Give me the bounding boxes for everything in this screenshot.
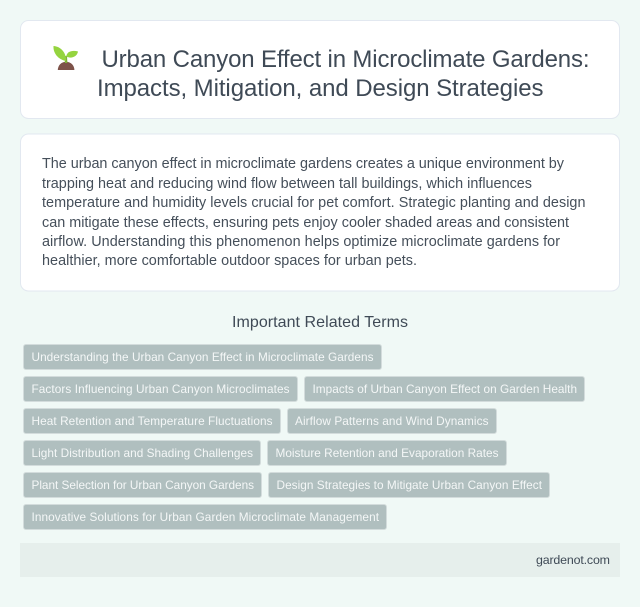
description text: can mitigate these effects, ensuring pets enjoy cooler shaded areas and consistent [42, 215, 569, 231]
chip: innovative solutions [24, 504, 386, 530]
title [97, 46, 590, 102]
chip: understanding [24, 344, 382, 370]
footer source text: gardenot.com [536, 553, 610, 567]
chip: heat retention [24, 408, 280, 434]
chip: plant selection [24, 472, 262, 498]
chip: light [24, 440, 260, 466]
description text: temperature and humidity levels crucial for pet comfort. Strategic planting and design [42, 195, 586, 211]
panel: description [20, 134, 620, 291]
header panel [20, 20, 620, 118]
chip: airflow: Airflow Patterns and Wind Dynamics [295, 414, 489, 428]
chip: moisture [268, 440, 506, 466]
chip: innovative solutions: Innovative Solutions for Urban Garden Microclimate Management [32, 510, 380, 524]
chip: design strategies: Design Strategies to Mitigate Urban Canyon Effect [276, 478, 543, 492]
description text: airflow. Understanding this phenomenon helps optimize microclimate gardens for [42, 234, 560, 250]
description text: healthier, more comfortable outdoor spaces for urban pets. [42, 253, 417, 269]
title: Impacts, Mitigation, and Design Strategies [97, 75, 544, 102]
description text [42, 156, 586, 269]
icon: seedling [53, 46, 78, 70]
chip: design strategies [268, 472, 550, 498]
chip: plant selection: Plant Selection for Urban Canyon Gardens [32, 478, 254, 492]
title: Urban Canyon Effect in Microclimate Gardens: [102, 46, 590, 73]
description text: trapping heat and reducing wind flow between tall buildings, which influences [42, 176, 532, 192]
related terms chips [24, 344, 584, 530]
footer [20, 543, 620, 577]
description text: The urban canyon effect in microclimate gardens creates a unique environment by [42, 156, 565, 172]
chip: impacts: Impacts of Urban Canyon Effect on Garden Health [312, 382, 577, 396]
chip: understanding: Understanding the Urban Canyon Effect in Microclimate Gardens [32, 350, 374, 364]
chip: moisture: Moisture Retention and Evaporation Rates [276, 446, 499, 460]
chip: factors: Factors Influencing Urban Canyon Microclimates [32, 382, 290, 396]
chip: heat retention: Heat Retention and Temperature Fluctuations [32, 414, 273, 428]
chip: airflow [288, 408, 496, 434]
chip: factors [24, 376, 298, 402]
chip: impacts [304, 376, 584, 402]
heading: related terms: Important Related Terms [232, 314, 408, 331]
chip: light: Light Distribution and Shading Challenges [32, 446, 253, 460]
